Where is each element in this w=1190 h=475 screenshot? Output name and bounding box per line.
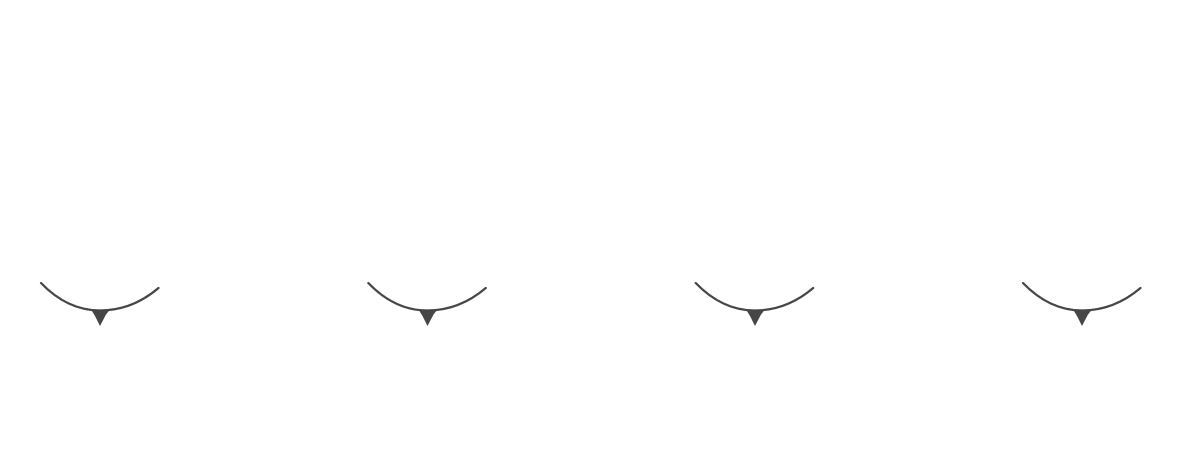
- marker 2: arc with pointer: [368, 283, 486, 326]
- marker 4: arc with pointer: [1023, 283, 1140, 326]
- marker 3: arc with pointer: [696, 283, 813, 326]
- marker 1: arc with pointer: [41, 283, 158, 326]
